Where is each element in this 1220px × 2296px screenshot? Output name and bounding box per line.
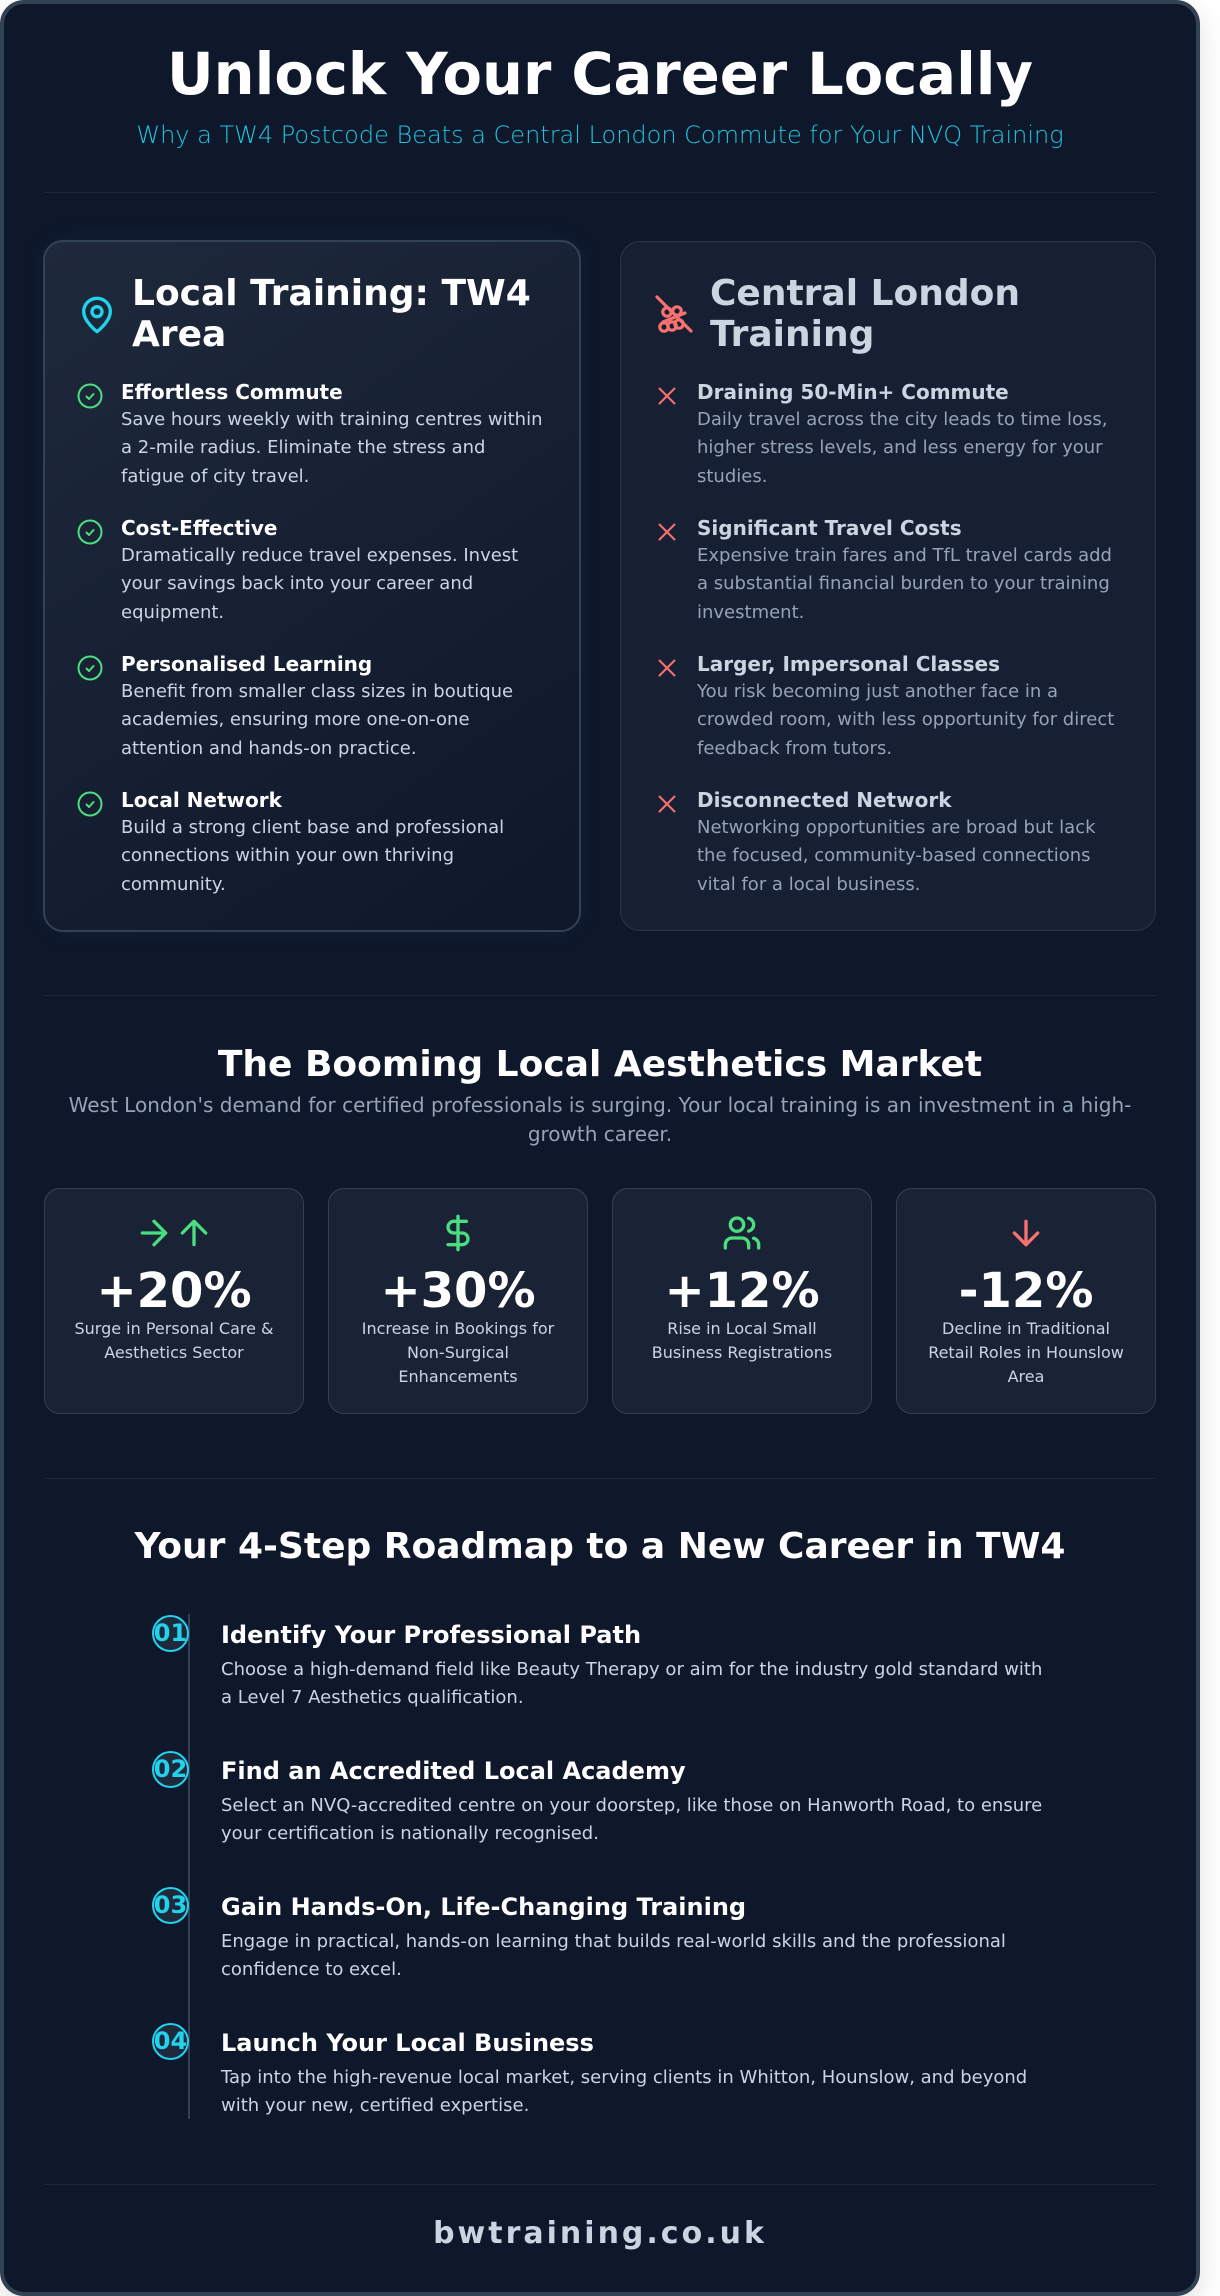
text: vital for a local business. bbox=[697, 874, 921, 895]
title: Unlock Your Career Locally bbox=[167, 40, 1033, 108]
icon: check bbox=[78, 792, 102, 816]
text: Local Network bbox=[121, 788, 282, 812]
label bbox=[74, 1318, 274, 1362]
heading: local training bbox=[132, 273, 531, 355]
step title: Gain Hands-On, Life-Changing Training bbox=[221, 1893, 746, 1921]
step description bbox=[221, 1792, 1042, 1849]
text: the focused, community-based connections bbox=[697, 845, 1091, 866]
step 1 number: 01 bbox=[154, 1619, 187, 1647]
text bbox=[121, 652, 513, 759]
step 3 bbox=[221, 1892, 1061, 1992]
panel: local training bbox=[43, 240, 581, 932]
market intro: West London's demand for certified professionals is surging. Your local training is an investment in a high- bbox=[69, 1093, 1131, 1117]
label bbox=[652, 1318, 832, 1362]
stat card: +30% bbox=[328, 1188, 588, 1414]
icon: map pin bbox=[82, 296, 112, 334]
label: Surge in Personal Care & bbox=[74, 1318, 274, 1338]
text: crowded room, with less opportunity for direct bbox=[697, 709, 1114, 730]
value: -12% bbox=[959, 1262, 1093, 1318]
step 2 number bbox=[152, 1751, 189, 1788]
step description: with your new, certified expertise. bbox=[221, 2095, 529, 2116]
label: Non-Surgical bbox=[407, 1342, 509, 1362]
value: +12% bbox=[664, 1262, 820, 1318]
value: +20% bbox=[96, 1262, 252, 1318]
heading: roadmap: Your 4-Step Roadmap to a New Career in TW4 bbox=[135, 1526, 1065, 1567]
step 1 bbox=[221, 1621, 1042, 1708]
step description: Choose a high-demand field like Beauty Therapy or aim for the industry gold standard with bbox=[221, 1659, 1042, 1680]
step 4 number bbox=[152, 2023, 189, 2060]
label: Retail Roles in Hounslow bbox=[928, 1342, 1124, 1362]
text: a 2-mile radius. Eliminate the stress and bbox=[121, 437, 485, 458]
market intro bbox=[69, 1093, 1131, 1146]
text: academies, ensuring more one-on-one bbox=[121, 709, 470, 730]
text: community. bbox=[121, 874, 226, 895]
step title: Launch Your Local Business bbox=[221, 2029, 594, 2057]
step description: your certification is nationally recognised. bbox=[221, 1823, 599, 1844]
central point: network bbox=[658, 788, 1096, 895]
text: Save hours weekly with training centres within bbox=[121, 409, 542, 430]
icon: arrow down bbox=[1012, 1220, 1040, 1246]
step description: a Level 7 Aesthetics qualification. bbox=[221, 1687, 524, 1708]
label: Decline in Traditional bbox=[942, 1318, 1110, 1338]
step description bbox=[221, 2064, 1027, 2121]
step description: Engage in practical, hands-on learning that builds real-world skills and the professional bbox=[221, 1931, 1006, 1952]
step title: Identify Your Professional Path bbox=[221, 1621, 641, 1649]
text bbox=[121, 380, 542, 487]
text: feedback from tutors. bbox=[697, 738, 892, 759]
text: attention and hands-on practice. bbox=[121, 738, 417, 759]
heading: central london bbox=[710, 273, 1020, 355]
market intro: growth career. bbox=[528, 1122, 672, 1146]
icon: dollar bbox=[446, 1214, 470, 1252]
stat card: +20% bbox=[44, 1188, 304, 1414]
text: Build a strong client base and professional bbox=[121, 817, 504, 838]
text: Significant Travel Costs bbox=[697, 516, 962, 540]
stat card: +12% bbox=[612, 1188, 872, 1414]
local point: cost-effective bbox=[78, 516, 518, 623]
text bbox=[697, 516, 1112, 623]
text: Networking opportunities are broad but lack bbox=[697, 817, 1096, 838]
heading: local training: Area bbox=[132, 314, 226, 355]
icon: check bbox=[78, 384, 102, 408]
step 2 number: 02 bbox=[154, 1755, 187, 1783]
step description bbox=[221, 1659, 1042, 1708]
icon: cross bbox=[658, 524, 676, 540]
text: Draining 50-Min+ Commute bbox=[697, 380, 1009, 404]
text bbox=[697, 788, 1096, 895]
step 4 number: 04 bbox=[154, 2027, 187, 2055]
heading: central london: Central London bbox=[710, 273, 1020, 314]
text: Dramatically reduce travel expenses. Invest bbox=[121, 545, 518, 566]
icon: crossed-out train bbox=[655, 295, 693, 333]
icon: arrows bbox=[140, 1220, 208, 1246]
text bbox=[121, 788, 504, 895]
local point: local network bbox=[78, 788, 504, 895]
subtitle: Why a TW4 Postcode Beats a Central London Commute for Your NVQ Training bbox=[136, 121, 1064, 149]
text: Larger, Impersonal Classes bbox=[697, 652, 1000, 676]
text: Effortless Commute bbox=[121, 380, 343, 404]
central point: costs bbox=[658, 516, 1112, 623]
step description: confidence to excel. bbox=[221, 1959, 402, 1980]
heading: local training: Local Training: TW4 bbox=[132, 273, 531, 314]
step description bbox=[221, 1928, 1006, 1985]
step 4 bbox=[221, 2028, 1061, 2128]
text: Benefit from smaller class sizes in boutique bbox=[121, 681, 513, 702]
stat card: -12% bbox=[896, 1188, 1156, 1414]
text: equipment. bbox=[121, 602, 224, 623]
label bbox=[928, 1318, 1124, 1386]
step 3 number: 03 bbox=[154, 1891, 187, 1919]
label: Aesthetics Sector bbox=[104, 1342, 244, 1362]
text: You risk becoming just another face in a bbox=[697, 681, 1058, 702]
text: a substantial financial burden to your training bbox=[697, 573, 1110, 594]
text: studies. bbox=[697, 466, 767, 487]
timeline line bbox=[188, 1614, 190, 2119]
text: Personalised Learning bbox=[121, 652, 372, 676]
label: Rise in Local Small bbox=[667, 1318, 817, 1338]
step 3 number bbox=[152, 1887, 189, 1924]
icon: cross bbox=[658, 796, 676, 812]
text: Expensive train fares and TfL travel cards add bbox=[697, 545, 1112, 566]
text: connections within your own thriving bbox=[121, 845, 454, 866]
icon: check bbox=[78, 520, 102, 544]
step description: Select an NVQ-accredited centre on your doorstep, like those on Hanworth Road, to ensure bbox=[221, 1795, 1042, 1816]
text: fatigue of city travel. bbox=[121, 466, 309, 487]
icon: cross bbox=[658, 388, 676, 404]
text bbox=[121, 516, 518, 623]
icon: cross bbox=[658, 660, 676, 676]
central point: commute bbox=[658, 380, 1108, 487]
step 1 number bbox=[152, 1615, 189, 1652]
text bbox=[697, 652, 1114, 759]
text bbox=[697, 380, 1108, 487]
icon: users bbox=[724, 1216, 760, 1250]
step title: Find an Accredited Local Academy bbox=[221, 1757, 686, 1785]
panel: central london bbox=[620, 241, 1156, 931]
heading: central london: Training bbox=[710, 314, 874, 355]
label: Area bbox=[1008, 1366, 1044, 1386]
footer url: bwtraining.co.uk bbox=[433, 2216, 767, 2250]
text: investment. bbox=[697, 602, 804, 623]
label: Enhancements bbox=[398, 1366, 518, 1386]
text: Daily travel across the city leads to time loss, bbox=[697, 409, 1108, 430]
icon: check bbox=[78, 656, 102, 680]
central point: classes bbox=[658, 652, 1114, 759]
step 2 bbox=[221, 1757, 1042, 1844]
local point: personalised learning bbox=[78, 652, 513, 759]
label: Increase in Bookings for bbox=[362, 1318, 554, 1338]
label: Business Registrations bbox=[652, 1342, 832, 1362]
text: higher stress levels, and less energy for your bbox=[697, 437, 1103, 458]
step description: Tap into the high-revenue local market, serving clients in Whitton, Hounslow, and beyond bbox=[221, 2067, 1027, 2088]
label bbox=[362, 1318, 554, 1386]
text: Cost-Effective bbox=[121, 516, 277, 540]
local point: effortless commute bbox=[78, 380, 542, 487]
heading: market: The Booming Local Aesthetics Market bbox=[218, 1044, 982, 1085]
text: Disconnected Network bbox=[697, 788, 952, 812]
value: +30% bbox=[380, 1262, 536, 1318]
text: your savings back into your career and bbox=[121, 573, 473, 594]
